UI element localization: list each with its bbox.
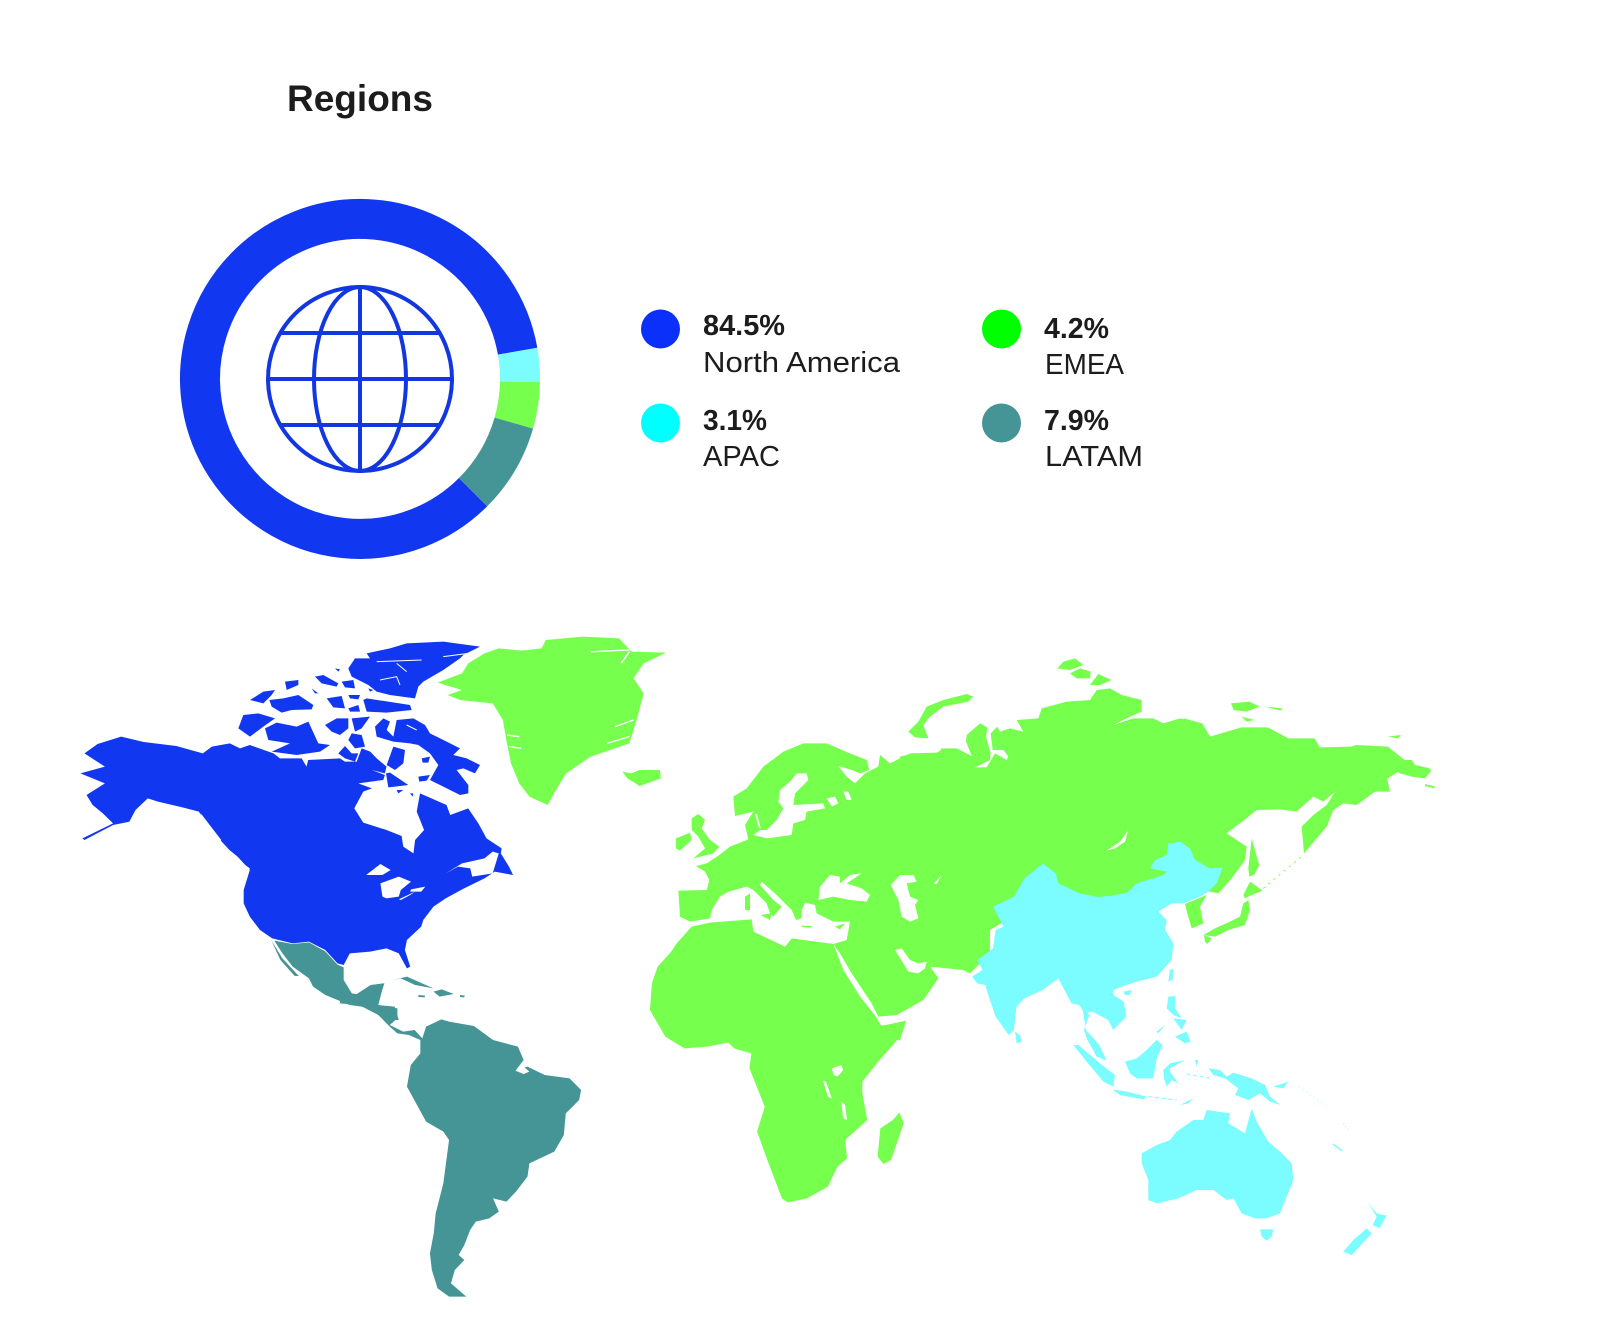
segment: APAC 3.1% bbox=[518, 351, 520, 382]
map region: Greenland (EMEA) bbox=[438, 637, 666, 805]
legend item: APAC bbox=[641, 404, 780, 473]
donut chart: share by region bbox=[200, 219, 520, 539]
legend item: LATAM: LATAM bbox=[1045, 441, 1143, 473]
legend item: LATAM: 7.9% bbox=[1044, 405, 1109, 437]
northeast and east China bbox=[1100, 842, 1223, 980]
Mexico and Caribbean bbox=[271, 941, 465, 1020]
segment: EMEA 4.2% bbox=[514, 382, 520, 423]
map region: EMEA (Europe, Russia, Middle East, Africa) bbox=[650, 658, 1435, 1202]
central Asia filler bbox=[980, 790, 1105, 950]
legend item: APAC: 3.1% bbox=[703, 405, 767, 437]
Russian Far East, Korea, Japan bbox=[1100, 760, 1435, 944]
world map bbox=[80, 637, 1435, 1297]
inland seas bbox=[753, 773, 942, 973]
central and southern Africa bbox=[650, 950, 906, 1202]
legend item: North America bbox=[641, 310, 901, 379]
Canadian Arctic islands bbox=[238, 642, 480, 797]
icon: globe bbox=[268, 287, 452, 471]
legend item: LATAM bbox=[982, 404, 1143, 473]
northeast Siberia bbox=[1184, 702, 1430, 780]
title: Regions bbox=[287, 78, 433, 119]
Southeast Asia and Oceania bbox=[1015, 968, 1387, 1255]
legend bbox=[641, 310, 1143, 473]
segment: North America 84.5% bbox=[200, 219, 518, 539]
legend item: EMEA: EMEA bbox=[1045, 349, 1125, 381]
northern Russia bbox=[900, 658, 1200, 800]
legend item: North America: North America bbox=[703, 347, 901, 379]
map region: APAC bbox=[972, 842, 1387, 1255]
map region: LATAM bbox=[271, 941, 581, 1297]
segment: LATAM 7.9% bbox=[473, 423, 514, 492]
China west, India and Indochina bbox=[972, 863, 1166, 1035]
mainland USA, Canada, Alaska bbox=[80, 737, 513, 968]
map region: North America bbox=[80, 642, 513, 968]
Europe and Middle East bbox=[670, 743, 990, 1040]
legend item: APAC: APAC bbox=[703, 441, 780, 473]
legend item: EMEA: 4.2% bbox=[1044, 313, 1109, 345]
Central and South America bbox=[340, 983, 581, 1297]
legend item: North America: 84.5% bbox=[703, 310, 785, 342]
north Africa bbox=[670, 919, 906, 1040]
legend item: EMEA bbox=[982, 310, 1125, 381]
